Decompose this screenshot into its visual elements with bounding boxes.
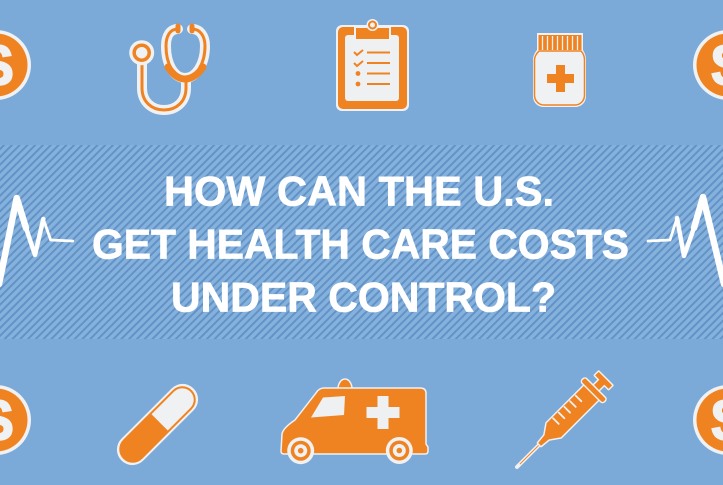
icon: heartbeat line left (0, 198, 73, 284)
icon: medicine jar (533, 33, 586, 107)
icon: syringe (506, 368, 616, 478)
icon: dollar coin top right (693, 30, 723, 100)
icon: dollar coin bottom right (693, 385, 723, 455)
icon: ambulance (281, 379, 428, 464)
icon: pill capsule (110, 377, 205, 472)
icon: clipboard (336, 19, 409, 111)
icon: heartbeat line right (648, 197, 723, 284)
title (92, 168, 629, 320)
title: UNDER CONTROL? (171, 274, 556, 320)
title: GET HEALTH CARE COSTS (92, 220, 629, 268)
icon: dollar coin top left (0, 30, 31, 100)
striped band (0, 145, 723, 339)
icon: dollar coin bottom left (0, 385, 31, 455)
title: HOW CAN THE U.S. (164, 168, 554, 214)
icon: stethoscope (129, 26, 205, 110)
